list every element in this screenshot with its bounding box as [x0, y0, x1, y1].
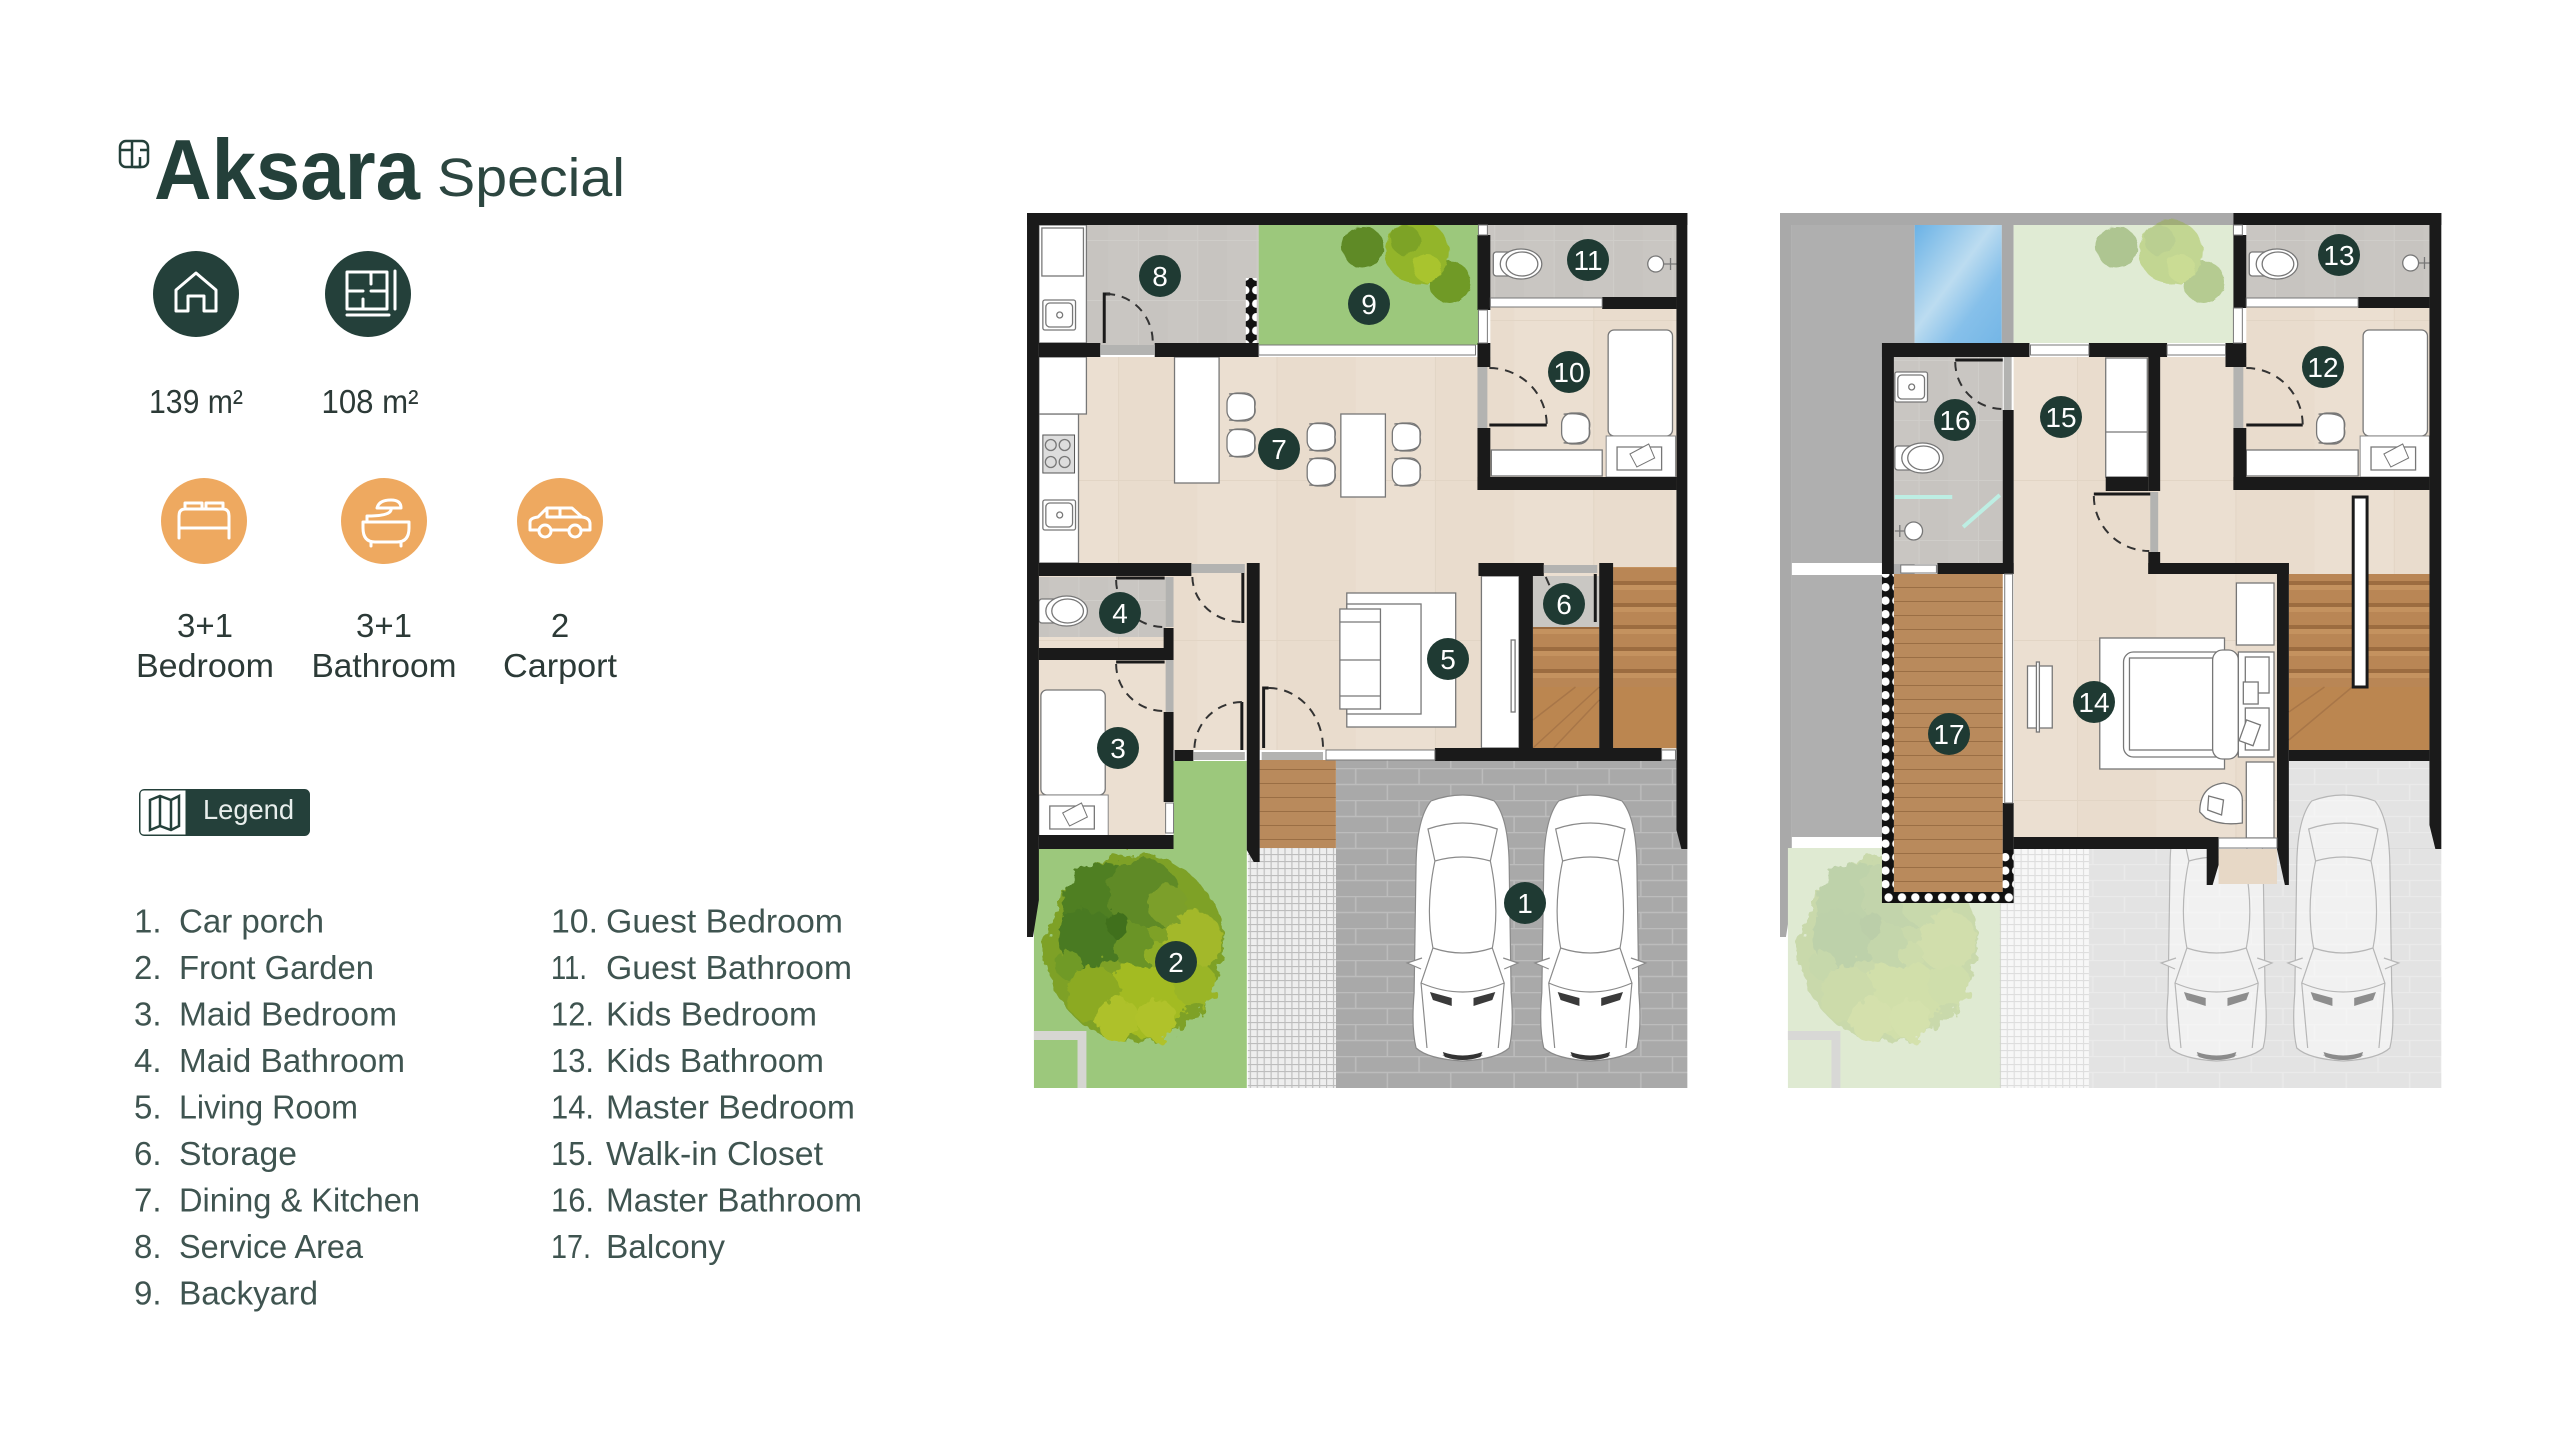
door swings: [1104, 294, 1595, 750]
legend list: column 2: Balcony: [606, 1228, 726, 1265]
legend list: column 2: Guest Bedroom: [606, 902, 843, 940]
number badges: 4: [1112, 598, 1128, 629]
upper stairs: [2289, 497, 2429, 750]
stat: 3+1 bathroom: 3+1: [356, 607, 412, 644]
upper floor plan: [1780, 213, 2441, 1088]
number badges: 12: [2307, 352, 2339, 383]
legend list: column 2: 15.: [551, 1135, 594, 1172]
legend list: column 1: 4.: [134, 1042, 162, 1079]
stat: land area 139 m2: [149, 251, 243, 420]
floors and outdoor surfaces: [1034, 225, 1687, 1088]
legend list: column 2: Kids Bedroom: [606, 996, 817, 1032]
upper furniture: [1895, 249, 2429, 838]
legend list: column 2: 17.: [551, 1228, 591, 1265]
trees: [1046, 220, 1471, 1042]
number badges: 5: [1440, 644, 1456, 675]
number badges: 6: [1556, 589, 1572, 620]
stat: 3+1 bathroom: [312, 478, 456, 684]
number badges: 15: [2045, 402, 2077, 433]
legend list: column 1: Storage: [179, 1135, 297, 1172]
legend list: column 1: Living Room: [179, 1088, 358, 1126]
number badges: 10: [1553, 357, 1585, 388]
legend list: column 1: 9.: [134, 1274, 162, 1312]
number badges: 9: [1361, 289, 1377, 320]
number badges: 1: [1517, 888, 1533, 919]
legend list: column 1: 2.: [134, 949, 162, 986]
stat: land area 139 m2: 139 m²: [149, 383, 243, 420]
stat: 3+1 bedroom: 3+1: [177, 607, 233, 644]
legend button: Legend: [203, 794, 294, 825]
legend list: column 2: Master Bedroom: [606, 1088, 855, 1126]
windows and door openings: [1100, 225, 1675, 833]
legend list: column 2: Kids Bathroom: [606, 1042, 824, 1079]
ground floor plan: [1027, 213, 1687, 1088]
stat: 2 carport: [503, 478, 617, 684]
title: Aksara Special: Aksara: [154, 123, 421, 218]
legend list: column 2: 10.: [551, 902, 598, 940]
number badges: 2: [1168, 947, 1184, 978]
number badges: [1097, 234, 2360, 983]
number badges: 3: [1110, 733, 1126, 764]
legend list: column 1: Front Garden: [179, 949, 374, 986]
legend list: column 2: 13.: [551, 1042, 594, 1079]
stairs: [1533, 567, 1676, 748]
number badges: 7: [1271, 434, 1287, 465]
legend list: column 1: Car porch: [179, 902, 324, 940]
legend list: column 1: Maid Bedroom: [179, 996, 397, 1032]
number badges: 11: [1573, 245, 1603, 276]
railing: [1246, 278, 1257, 343]
legend list: column 1: 1.: [134, 902, 162, 940]
stat: 2 carport: 2: [551, 607, 569, 644]
legend list: column 1: 7.: [134, 1182, 162, 1218]
legend list: column 2: Master Bathroom: [606, 1182, 862, 1218]
legend list: column 2: Walk-in Closet: [606, 1135, 823, 1172]
upper walls: [1882, 213, 2441, 885]
stat: 3+1 bedroom: [136, 478, 274, 684]
interior floors: [1894, 225, 2429, 892]
legend list: column 2: 12.: [551, 996, 594, 1032]
stat: building area 108 m2: 108 m²: [322, 383, 418, 420]
legend list: column 1: 6.: [134, 1135, 162, 1172]
legend list: column 2: 16.: [551, 1182, 594, 1218]
legend list: column 2: Guest Bathroom: [606, 949, 852, 986]
number badges: 17: [1933, 719, 1965, 750]
legend list: column 1: Service Area: [179, 1228, 364, 1265]
cars: [1407, 795, 1646, 1061]
number badges: 8: [1152, 261, 1168, 292]
balcony railing: [1882, 574, 2014, 903]
stat: 2 carport: Carport: [503, 647, 617, 684]
title: Aksara Special: Special: [437, 148, 625, 208]
legend list: column 2: 11.: [551, 949, 587, 986]
legend list: column 1: 3.: [134, 996, 162, 1032]
legend list: column 1: 5.: [134, 1088, 162, 1126]
stat: 3+1 bathroom: Bathroom: [312, 647, 456, 684]
number badges: 13: [2323, 240, 2355, 271]
furniture: [1039, 225, 1676, 836]
stat: 3+1 bedroom: Bedroom: [136, 647, 274, 684]
number badges: 16: [1939, 405, 1971, 436]
legend list: column 1: 8.: [134, 1228, 162, 1265]
legend button: [140, 790, 310, 836]
title: Aksara Special: [120, 123, 625, 218]
number badges: 14: [2078, 687, 2110, 718]
icon: floor plan mark: [120, 141, 148, 167]
legend list: column 1: Backyard: [179, 1274, 318, 1312]
legend list: column 1: Maid Bathroom: [179, 1042, 405, 1079]
legend list: column 1: [134, 902, 420, 1312]
legend list: column 2: [551, 902, 862, 1265]
stat: building area 108 m2: [322, 251, 418, 420]
walls: [1027, 213, 1687, 937]
faded ground floor context: [1780, 213, 2441, 1088]
upper windows and doors: [1901, 225, 2358, 848]
legend list: column 2: 14.: [551, 1088, 594, 1126]
legend list: column 1: Dining & Kitchen: [179, 1182, 420, 1218]
